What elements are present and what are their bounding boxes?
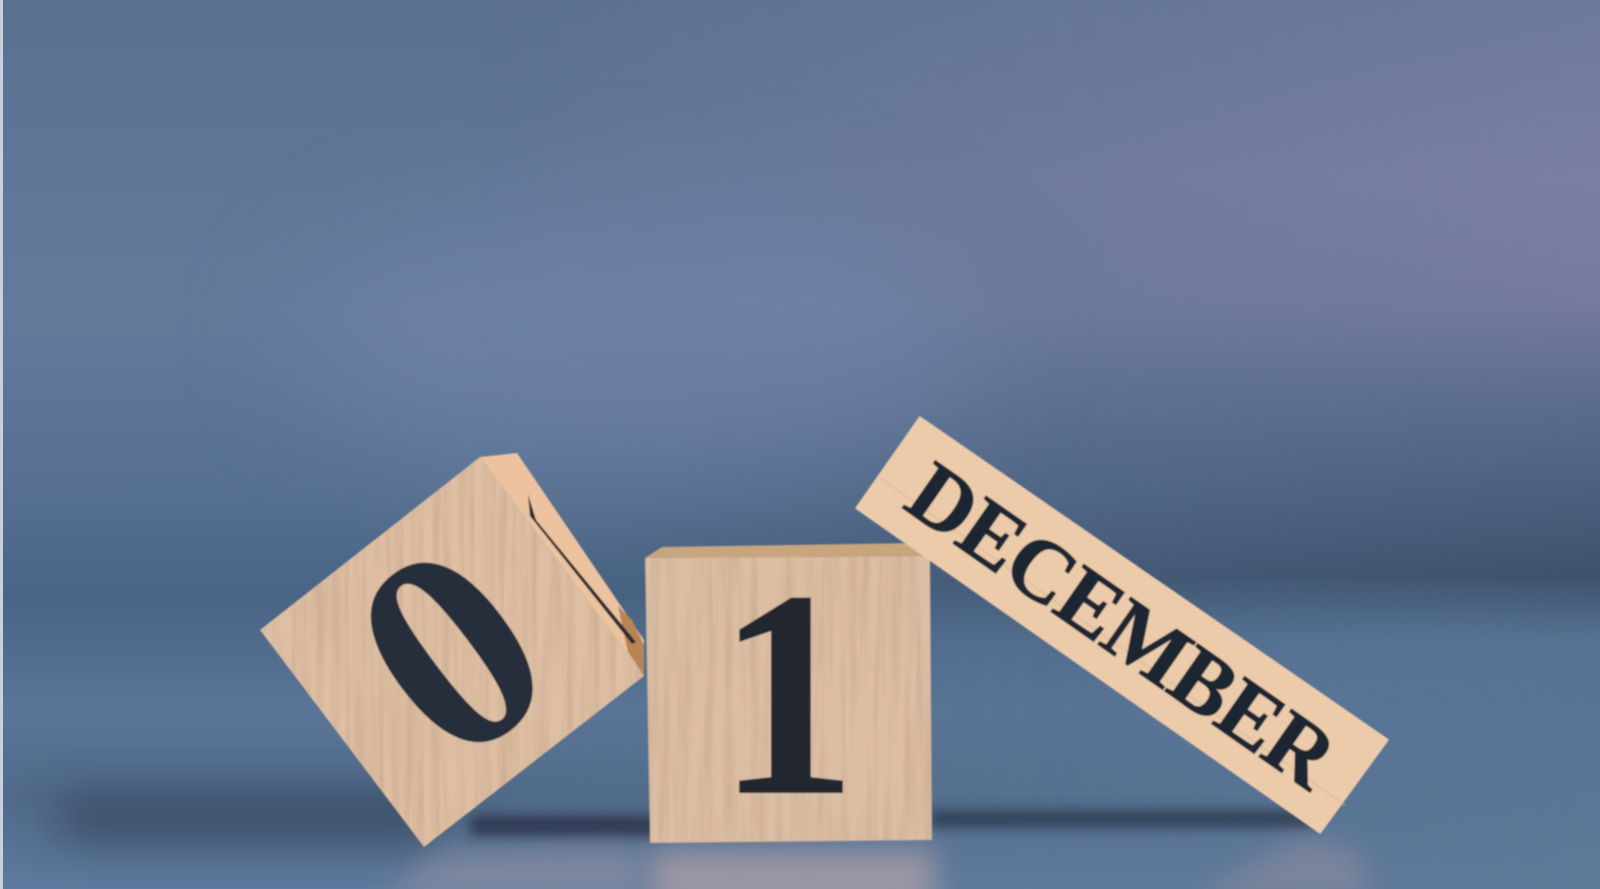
block: upright one — [640, 531, 935, 858]
block: tilted zero — [260, 452, 645, 848]
block side face with partial numeral — [480, 453, 644, 676]
numeral 0: 0 — [296, 479, 605, 822]
block top face — [645, 543, 930, 558]
block front face — [640, 550, 935, 845]
floor reflections of blocks — [380, 838, 1370, 889]
bar face — [857, 418, 1387, 832]
month label: DECEMBER — [890, 444, 1355, 809]
numeral 1: 1 — [717, 531, 857, 858]
block: December bar — [857, 418, 1387, 832]
block front face — [260, 456, 644, 848]
floor shadows cast by blocks — [60, 795, 1315, 840]
